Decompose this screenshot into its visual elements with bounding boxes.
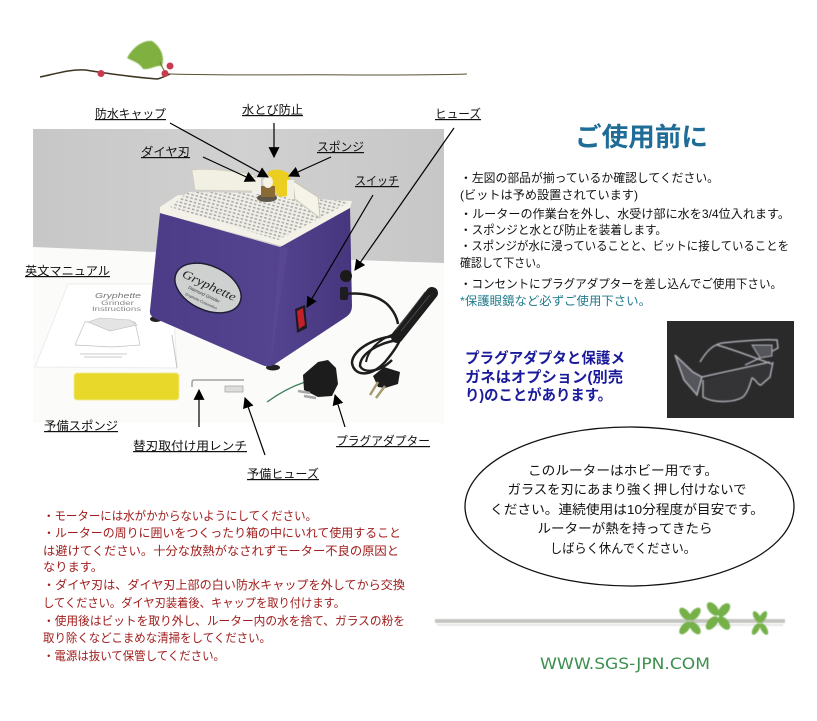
decoration: bottom bar with leaves bbox=[435, 600, 785, 636]
arrow: splash guard bbox=[273, 123, 275, 157]
arrow: plug adapter bbox=[335, 395, 345, 427]
photo: safety glasses bbox=[667, 321, 794, 418]
fuse holder knob bbox=[340, 270, 352, 282]
callout: hobby use oval: ガラスを刃にあまり強く押し付けないで bbox=[508, 482, 746, 497]
cord socket bbox=[340, 287, 348, 300]
text block: setup instructions: (ビットは予め設置されています) bbox=[460, 188, 638, 202]
grinder body bbox=[150, 169, 352, 370]
nameplate: Gryphette bbox=[180, 267, 239, 304]
plug adapter bbox=[267, 360, 338, 402]
label: splash guard: 水とび防止 bbox=[242, 102, 303, 117]
text block: setup instructions: 確認して下さい。 bbox=[460, 255, 547, 270]
photo: grinder and accessories bbox=[33, 129, 444, 423]
heading: ご使用前に bbox=[575, 122, 708, 152]
label: plug adapter: プラグアダプター bbox=[336, 433, 430, 448]
callout: hobby use oval bbox=[465, 427, 794, 586]
text block: cautions: してください。ダイヤ刃装着後、キャップを取り付けます。 bbox=[43, 595, 345, 610]
text block: setup instructions: ・スポンジと水とび防止を装着します。 bbox=[460, 222, 667, 237]
website url: WWW.SGS-JPN.COM bbox=[540, 654, 710, 673]
part labels bbox=[25, 102, 481, 481]
power switch bbox=[295, 305, 307, 333]
power cord bbox=[346, 292, 432, 398]
diamond bit bbox=[257, 194, 277, 202]
label: spare sponge: 予備スポンジ bbox=[44, 419, 118, 433]
label: switch: スイッチ bbox=[355, 174, 399, 188]
arrow: diamond bit bbox=[203, 157, 255, 181]
text block: setup instructions bbox=[460, 170, 790, 308]
spare sponge bbox=[74, 373, 179, 400]
manual booklet: Grinder bbox=[101, 300, 135, 307]
label: waterproof cap: 防水キャップ bbox=[95, 106, 166, 121]
text block: setup instructions: ・コンセントにプラグアダプターを差し込んでご使用下さい。 bbox=[460, 276, 782, 291]
label: fuse: ヒューズ bbox=[435, 106, 481, 121]
text block: cautions: ・モーターには水がかからないようにしてください。 bbox=[43, 508, 317, 523]
callout: optional accessories note: り)のことがあります。 bbox=[465, 386, 612, 404]
callout: hobby use oval: しばらく休んでください。 bbox=[550, 541, 696, 556]
text block: setup instructions: *保護眼鏡など必ずご使用下さい。 bbox=[460, 293, 651, 308]
callout: optional accessories note bbox=[465, 349, 625, 404]
manual booklet: Instructions bbox=[92, 306, 142, 313]
text block: cautions: ・使用後はビットを取り外し、ルーター内の水を捨て、ガラスの粉を bbox=[43, 613, 405, 628]
splash guard bbox=[192, 169, 254, 191]
nameplate bbox=[167, 253, 249, 323]
arrow: waterproof cap bbox=[170, 123, 268, 177]
label: spare fuse: 予備ヒューズ bbox=[247, 466, 319, 481]
text block: cautions: は避けてください。十分な放熱がなされずモーター不良の原因と bbox=[43, 543, 399, 558]
arrow: sponge bbox=[289, 157, 331, 176]
text block: setup instructions: ・ルーターの作業台を外し、水受け部に水を3/4位入れます。 bbox=[460, 206, 790, 221]
sponge on the guard bbox=[268, 170, 290, 197]
nameplate: Gryphette Corporation bbox=[185, 292, 218, 310]
label: sponge: スポンジ bbox=[317, 140, 364, 154]
spare fuse bbox=[225, 386, 243, 392]
text block: setup instructions: ・スポンジが水に浸っていることと、ビットに接していることを bbox=[460, 238, 789, 253]
decoration: top vine with leaf and berries bbox=[40, 41, 467, 79]
work table bbox=[160, 195, 352, 246]
label: diamond bit: ダイヤ刃 bbox=[141, 144, 190, 159]
callout: hobby use oval: ルーターが熱を持ってきたら bbox=[538, 521, 712, 536]
nameplate: Diamond Grinder bbox=[187, 285, 221, 304]
arrow: spare fuse bbox=[245, 398, 265, 455]
manual booklet: Gryphette bbox=[95, 293, 141, 300]
callout: optional accessories note: プラグアダプタと保護メ bbox=[465, 349, 625, 367]
manual booklet bbox=[35, 284, 177, 368]
text block: setup instructions: ・左図の部品が揃っているか確認してください。 bbox=[460, 170, 719, 185]
callout: hobby use oval: このルーターはホビー用です。 bbox=[528, 463, 718, 478]
callout: optional accessories note: ガネはオプション(別売 bbox=[465, 369, 623, 386]
label: English manual: 英文マニュアル bbox=[25, 264, 110, 278]
text block: cautions: 取り除くなどこまめな清掃をしてください。 bbox=[43, 630, 271, 645]
arrow: wrench bbox=[198, 390, 200, 427]
text block: cautions: ・ダイヤ刃は、ダイヤ刃上部の白い防水キャップを外してから交換 bbox=[43, 577, 405, 592]
text block: cautions: ・電源は抜いて保管してください。 bbox=[43, 648, 225, 663]
arrow: switch bbox=[307, 195, 373, 307]
arrow: fuse bbox=[355, 128, 454, 270]
label: wrench: 替刃取付け用レンチ bbox=[133, 439, 247, 453]
text block: cautions: なります。 bbox=[43, 560, 103, 574]
callout: hobby use oval: ください。連続使用は10分程度が目安です。 bbox=[490, 502, 764, 517]
text block: cautions: ・ルーターの周りに囲いをつくったり箱の中にいれて使用すること bbox=[43, 525, 401, 540]
text block: cautions bbox=[43, 508, 405, 663]
hex wrench bbox=[192, 380, 244, 387]
